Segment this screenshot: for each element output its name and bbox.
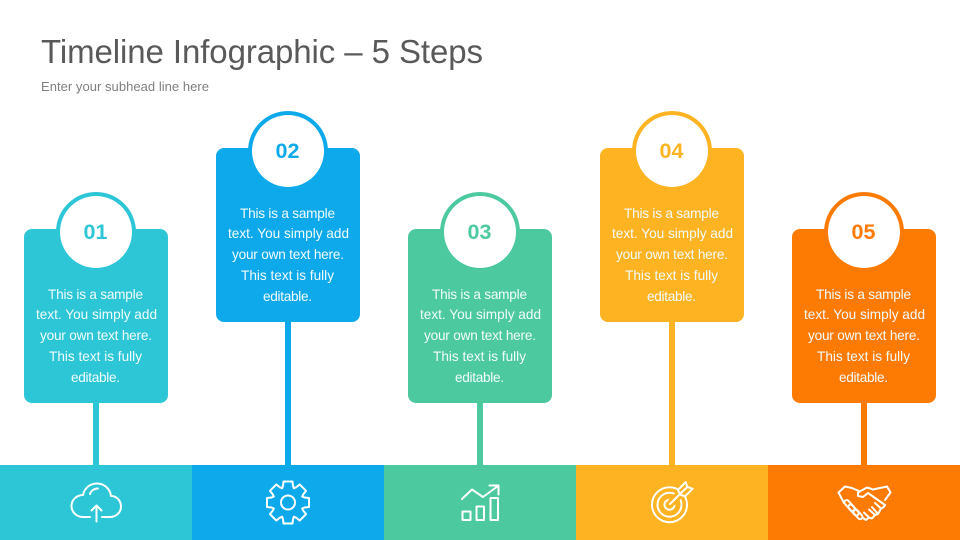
- step 04 text: [612, 206, 733, 304]
- step 02 text: text. You simply add: [228, 226, 349, 241]
- step 02 text: your own text here.: [232, 247, 344, 262]
- step 05 number: 05: [852, 220, 875, 244]
- icon: cloud upload: [72, 484, 121, 522]
- step 01 text: your own text here.: [40, 328, 152, 343]
- icon: handshake: [838, 486, 890, 520]
- step 04 text: text. You simply add: [612, 226, 733, 241]
- step 03 text: text. You simply add: [420, 307, 541, 322]
- step 05 card: [792, 192, 936, 466]
- step 01 text: editable.: [71, 370, 120, 385]
- step 02 text: This text is fully: [241, 268, 334, 283]
- step 02 text: This is a sample: [240, 206, 335, 221]
- step 05 text: editable.: [839, 370, 888, 385]
- bottom colour band: [0, 465, 960, 540]
- step 05 text: your own text here.: [808, 328, 920, 343]
- step 01 text: This is a sample: [48, 287, 143, 302]
- step 01 text: [36, 287, 157, 385]
- step 04 card: [600, 111, 744, 466]
- step 03 text: your own text here.: [424, 328, 536, 343]
- step 04 text: editable.: [647, 289, 696, 304]
- step 04 text: This is a sample: [624, 206, 719, 221]
- step 04 text: This text is fully: [625, 268, 718, 283]
- step 05 text: This is a sample: [816, 287, 911, 302]
- title: Timeline Infographic – 5 Steps: [41, 33, 483, 70]
- subhead: Enter your subhead line here: [41, 79, 209, 94]
- icon: gear: [267, 482, 309, 524]
- step 04 text: your own text here.: [616, 247, 728, 262]
- step 03 text: This text is fully: [433, 349, 526, 364]
- step 05 text: text. You simply add: [804, 307, 925, 322]
- step 02 text: editable.: [263, 289, 312, 304]
- step 01 text: This text is fully: [49, 349, 142, 364]
- icon: growth chart: [462, 486, 498, 520]
- step 03 card: [408, 192, 552, 466]
- step 05 text: [804, 287, 925, 385]
- step 03 text: editable.: [455, 370, 504, 385]
- step 02 card: [216, 111, 360, 466]
- step 01 card: [24, 192, 168, 466]
- icon: target with arrow: [652, 482, 693, 522]
- step 01 number: 01: [84, 220, 107, 244]
- step 04 number: 04: [660, 139, 683, 163]
- step 02 text: [228, 206, 349, 304]
- step 02 number: 02: [276, 139, 299, 163]
- step 03 number: 03: [468, 220, 491, 244]
- step 03 text: This is a sample: [432, 287, 527, 302]
- step 05 text: This text is fully: [817, 349, 910, 364]
- step 03 text: [420, 287, 541, 385]
- step 01 text: text. You simply add: [36, 307, 157, 322]
